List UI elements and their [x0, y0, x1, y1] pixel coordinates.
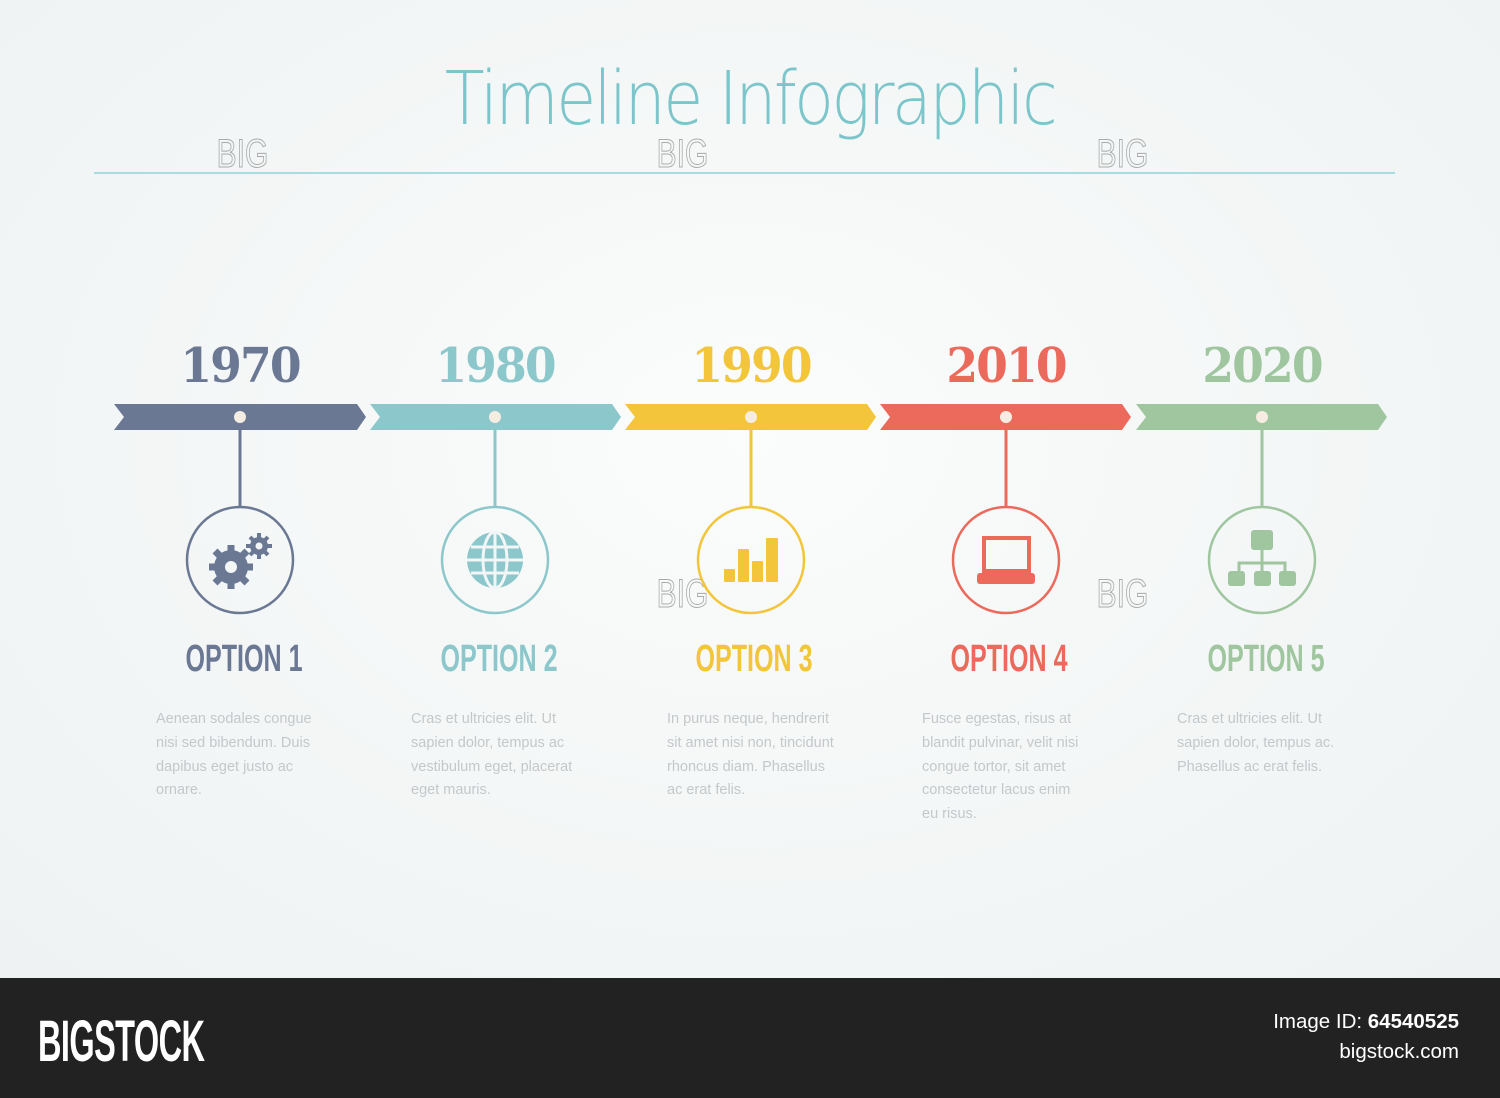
text: OPTION 3: [695, 638, 813, 680]
arrow 2010: [880, 404, 1131, 613]
footer bar: [0, 978, 1500, 1098]
text: OPTION 1: [185, 638, 303, 680]
footer image id: [1273, 1010, 1459, 1063]
text: 2020: [1202, 338, 1322, 394]
icon: bar chart: [724, 538, 778, 582]
arrow 2020: [1136, 404, 1387, 613]
descriptions: [156, 711, 1334, 822]
arrow 1970: [114, 404, 366, 613]
title: Timeline Infographic: [445, 56, 1055, 142]
text: 1980: [435, 338, 555, 394]
footer image id: Image ID: 64540525: [1273, 1010, 1459, 1033]
text: 1970: [180, 338, 300, 394]
text: Fusce egestas, risus at blandit pulvinar, velit nisi congue tortor, sit amet consectetur lacus enim eu risus.: [922, 711, 1078, 822]
text: OPTION 2: [440, 638, 558, 680]
option labels: [185, 638, 1325, 680]
text: Cras et ultricies elit. Ut sapien dolor, tempus ac vestibulum eget, placerat eget mauris.: [411, 711, 572, 798]
text: OPTION 5: [1207, 638, 1325, 680]
text: Cras et ultricies elit. Ut sapien dolor, tempus ac. Phasellus ac erat felis.: [1177, 711, 1334, 775]
text: 1990: [691, 338, 811, 394]
icon: globe: [467, 532, 523, 588]
text: 2010: [946, 338, 1066, 394]
years: [180, 338, 1322, 394]
footer image id: bigstock.com: [1339, 1040, 1459, 1063]
icon: gears: [209, 533, 272, 589]
text: Aenean sodales congue nisi sed bibendum. Duis dapibus eget justo ac ornare.: [156, 711, 312, 798]
text: In purus neque, hendrerit sit amet nisi non, tincidunt rhoncus diam. Phasellus ac erat felis.: [667, 711, 834, 798]
text: OPTION 4: [950, 638, 1068, 680]
arrow 1990: [625, 404, 876, 613]
arrow 1980: [370, 404, 621, 613]
icon: hierarchy: [1228, 530, 1296, 586]
icon: laptop: [977, 538, 1035, 584]
footer logo: BIGSTOCK: [38, 1009, 204, 1074]
